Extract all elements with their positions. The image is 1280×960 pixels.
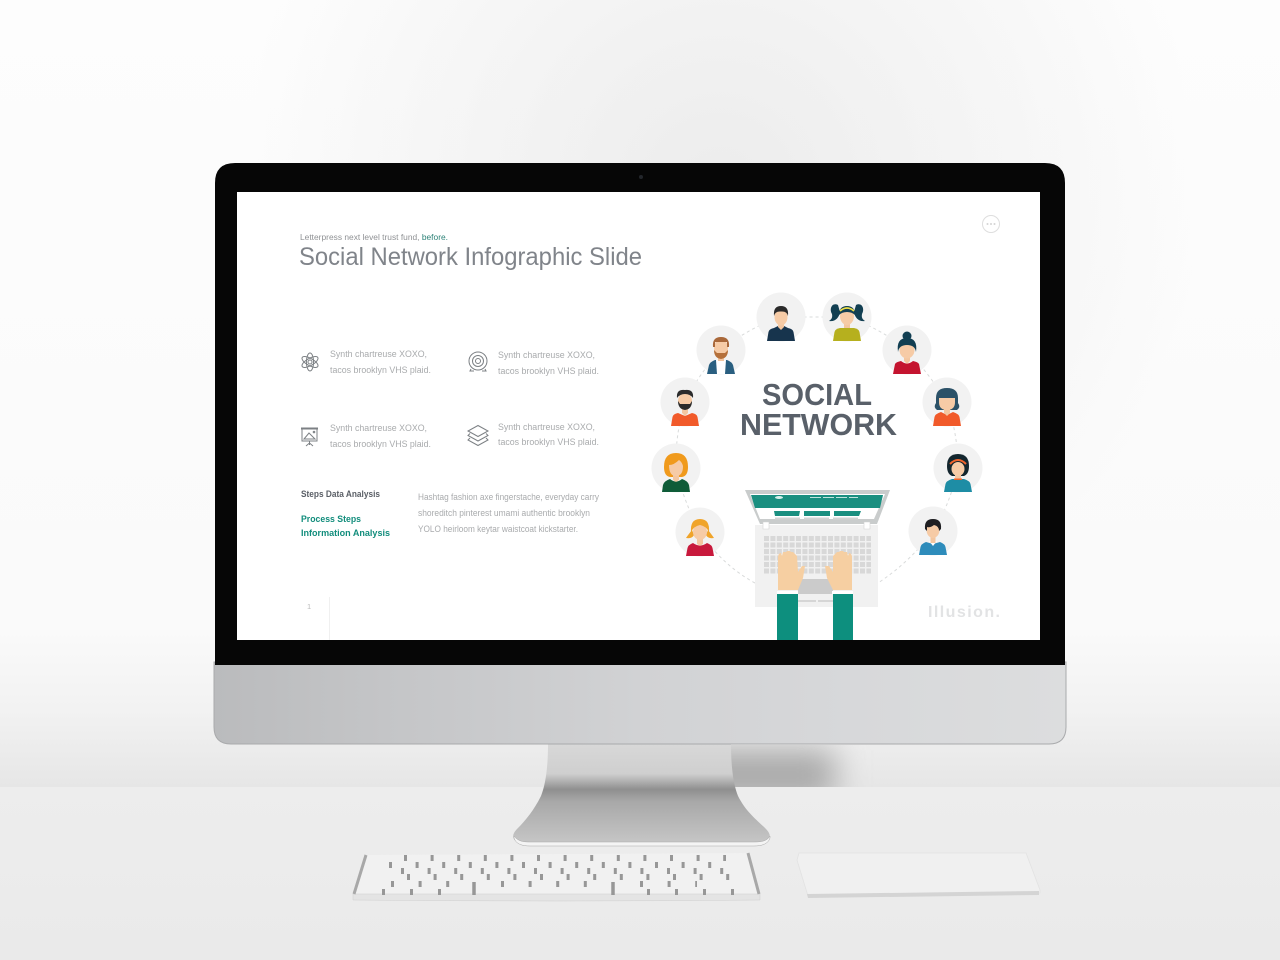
laptop base (755, 525, 878, 607)
slide screen (237, 192, 1040, 640)
text: tacos brooklyn VHS plaid. (330, 439, 431, 449)
monitor aluminium chin (214, 662, 1066, 744)
teal process labels: Information Analysis (301, 528, 390, 539)
avatar: girl blonde pigtails (676, 508, 724, 556)
title: Social Network Infographic Slide (299, 243, 642, 271)
text (498, 350, 599, 376)
avatar: woman with bun (882, 326, 932, 374)
steps heading: Steps Data Analysis (301, 489, 380, 500)
teal process labels: Process Steps (301, 514, 361, 525)
wall soft glow (200, 0, 1280, 500)
avatar: woman orange headband (934, 444, 982, 492)
laptop screen (745, 490, 890, 524)
eyebrow text: Letterpress next level trust fund, before. (300, 232, 448, 242)
avatar: woman orange hair (652, 444, 700, 492)
teal process labels (301, 514, 390, 539)
icon: atom (300, 353, 320, 371)
feature: target icon and text (469, 350, 599, 376)
page divider (329, 597, 330, 640)
feature: layers icon and text (468, 422, 599, 447)
text: Synth chartreuse XOXO, (330, 423, 427, 433)
touchpad (798, 579, 833, 594)
brand wordmark: Illusion. (928, 604, 1000, 621)
avatar: man dark sweater (756, 292, 806, 342)
avatar: young man blue shirt (908, 506, 958, 556)
camera (639, 175, 643, 179)
keyboard edge (353, 894, 760, 901)
text: tacos brooklyn VHS plaid. (498, 366, 599, 376)
text: Synth chartreuse XOXO, (330, 349, 427, 359)
right arm (833, 594, 853, 640)
paragraph (418, 492, 599, 534)
text: Synth chartreuse XOXO, (498, 422, 595, 432)
laptop illustration (745, 490, 890, 640)
desk surface (0, 787, 1280, 960)
left hand (778, 551, 805, 590)
avatar: girl pigtails (822, 292, 872, 342)
text: tacos brooklyn VHS plaid. (498, 437, 599, 447)
stand base edge (514, 836, 770, 846)
network heading: NETWORK (740, 407, 898, 442)
feature: atom icon and text (300, 349, 431, 375)
left cuff (777, 591, 798, 594)
text: Synth chartreuse XOXO, (498, 350, 595, 360)
right hand (825, 551, 852, 590)
network heading: SOCIAL (762, 377, 872, 412)
icon: layers (468, 426, 488, 446)
keyboard body (354, 853, 759, 897)
left arm (777, 594, 798, 640)
monitor black bezel (215, 163, 1065, 665)
text: tacos brooklyn VHS plaid. (330, 365, 431, 375)
network heading (740, 377, 898, 442)
monitor stand (513, 744, 770, 843)
paragraph: shoreditch pinterest umami authentic brooklyn (418, 508, 590, 518)
key gaps (382, 858, 737, 895)
feature: presentation icon and text (301, 423, 431, 449)
menu dots icon (982, 216, 1000, 232)
trackpad (797, 853, 1040, 898)
avatar: bearded man orange shirt (660, 378, 710, 426)
hinges (763, 522, 870, 529)
avatar: bearded man blue jacket (696, 326, 746, 374)
touchpad buttons (798, 600, 833, 602)
text (498, 422, 599, 447)
text (330, 423, 431, 449)
text (330, 349, 431, 375)
keyboard side edges (354, 853, 759, 894)
icon: target (469, 352, 487, 371)
keyboard (353, 853, 760, 901)
paragraph: Hashtag fashion axe fingerstache, everyday carry (418, 492, 599, 502)
page number: 1 (307, 602, 311, 611)
laptop keys (764, 538, 871, 571)
icon: presentation board (301, 428, 318, 446)
dashed network ring (676, 317, 958, 583)
right cuff (832, 591, 853, 594)
paragraph: YOLO heirloom keytar waistcoat kickstarter. (418, 524, 578, 534)
avatar: woman orange top (922, 378, 972, 426)
monitor shadow on wall (731, 745, 852, 787)
